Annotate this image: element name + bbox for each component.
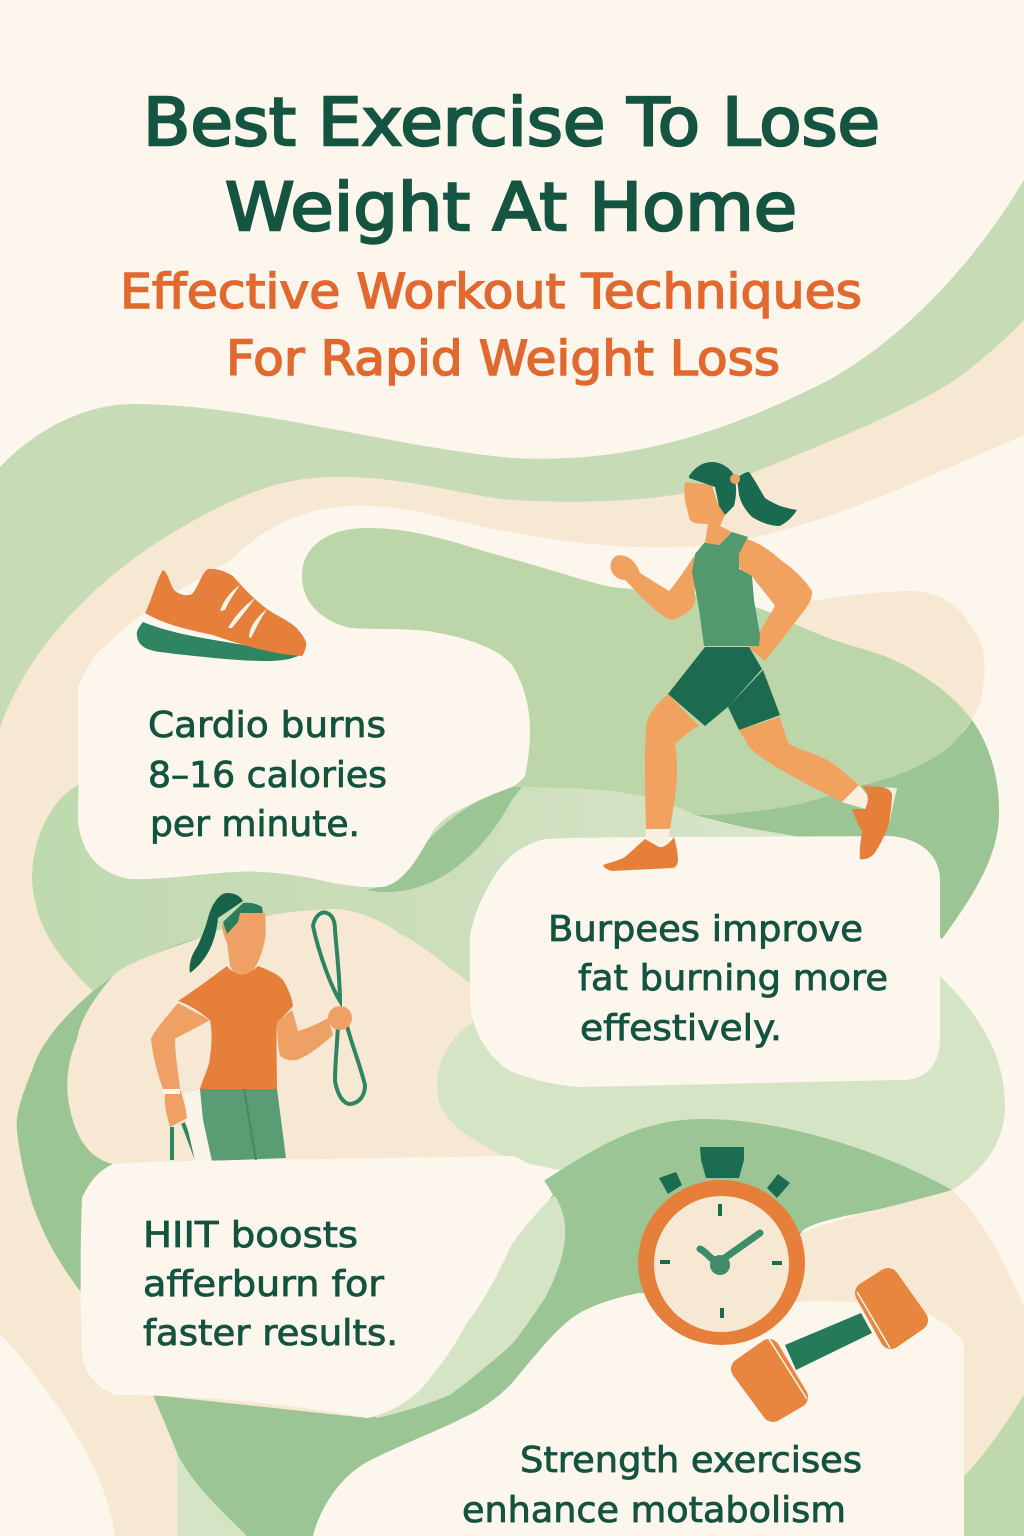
panel: HIIT: afferburn for [143, 1264, 384, 1305]
panel: cardio [78, 561, 530, 887]
panel: burpees [470, 836, 940, 1087]
icon: dumbbell [742, 1279, 917, 1411]
subtitle: Effective Workout Techniques [120, 264, 862, 320]
panel: HIIT: faster results. [143, 1313, 398, 1354]
panel: strength [313, 1293, 964, 1536]
icon: running shoe [137, 569, 306, 661]
panel: cardio: 8–16 calories [148, 755, 387, 796]
panel: cardio: Cardio burns [148, 705, 386, 746]
title: Weight At Home [225, 169, 797, 246]
panel: strength: enhance motabolism [462, 1490, 846, 1531]
panel: burpees: fat burning more [578, 958, 888, 999]
panel: cardio: per minute. [150, 804, 360, 845]
title [143, 84, 880, 246]
title: Best Exercise To Lose [143, 84, 880, 161]
subtitle [120, 264, 862, 387]
subtitle: For Rapid Weight Loss [226, 331, 780, 387]
icon: stopwatch [638, 1147, 805, 1345]
panel: HIIT: HIIT boosts [143, 1215, 358, 1256]
figure: woman with jump rope [151, 893, 365, 1161]
panel: strength: Strength exercises [520, 1440, 862, 1481]
panel: burpees: Burpees improve [548, 909, 863, 950]
panel: burpees: effestively. [580, 1008, 782, 1049]
panel: HIIT [81, 1156, 553, 1418]
figure: runner [603, 462, 897, 871]
